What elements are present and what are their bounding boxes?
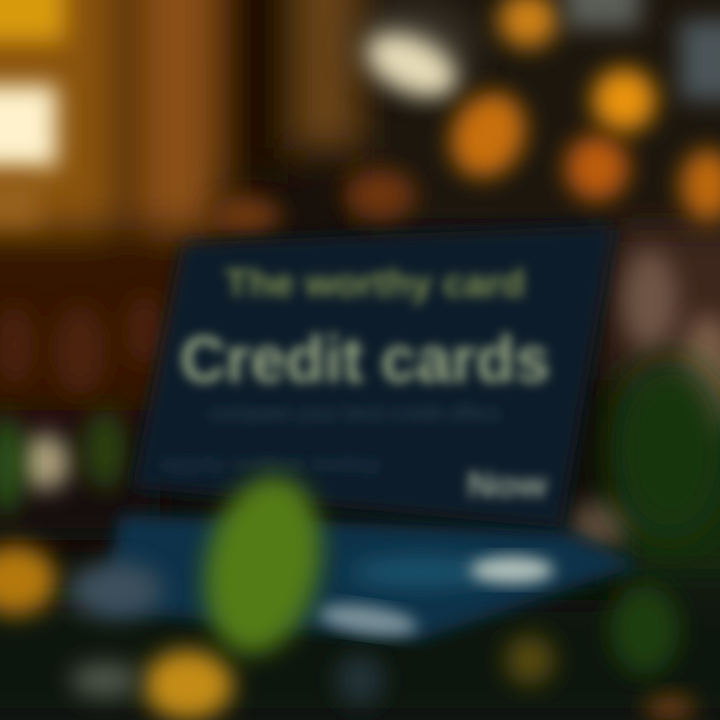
laptop screen (132, 225, 615, 528)
screen subtitle: compare your best credit offers (210, 403, 500, 425)
bright window (0, 0, 65, 225)
screen small text: apply online today (160, 454, 380, 474)
shelf detail (0, 295, 163, 395)
laptop keyboard (67, 515, 640, 641)
screen title: Credit cards (180, 322, 550, 396)
green leaf (190, 465, 336, 665)
screen button: Now (467, 464, 548, 505)
screen heading: The worthy card (225, 263, 525, 305)
